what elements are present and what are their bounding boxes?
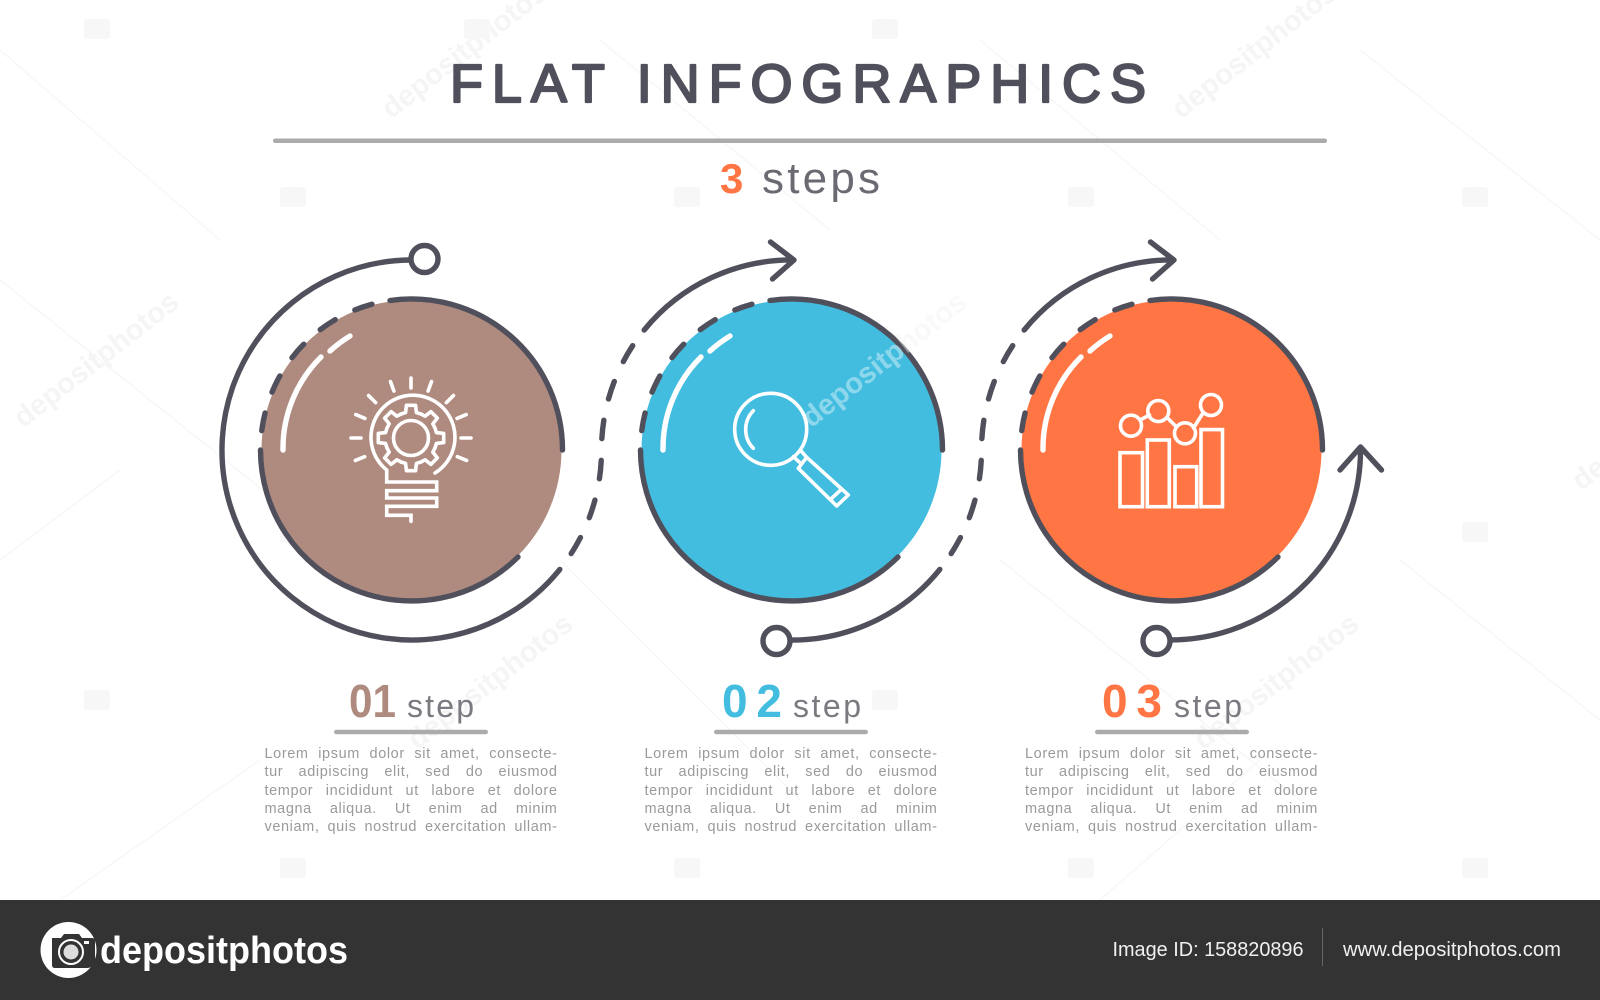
arrow: into step 2 xyxy=(644,242,794,330)
footer logo text: depositphotos xyxy=(100,930,348,972)
text block: step 2 xyxy=(644,746,938,835)
icon: magnifier xyxy=(735,393,848,506)
text block: step 3 xyxy=(1025,746,1318,835)
panel: step 3 circle xyxy=(1020,242,1382,654)
label: 01 step: step xyxy=(407,688,474,724)
text block: step 1: tur adipiscing elit, sed do eiusmod xyxy=(264,764,558,780)
label: 02 step xyxy=(714,675,868,734)
subtitle: 3 steps: steps xyxy=(762,154,880,203)
footer logo icon xyxy=(40,922,96,978)
footer image id: Image ID: 158820896 xyxy=(1112,939,1304,961)
outer arc: step 1 xyxy=(222,260,560,640)
start node: step 1 xyxy=(411,246,438,272)
watermark text xyxy=(8,0,1600,756)
title: FLAT INFOGRAPHICS xyxy=(450,54,1146,114)
text block: step 1: magna aliqua. Ut enim ad minim xyxy=(264,801,558,817)
start node: step 3 xyxy=(1143,628,1170,654)
watermark text: depositphotos xyxy=(1188,608,1365,756)
footer url: www.depositphotos.com xyxy=(1342,939,1561,961)
text block: step 3: magna aliqua. Ut enim ad minim xyxy=(1025,801,1318,817)
text block: step 2: Lorem ipsum dolor sit amet, consecte- xyxy=(644,746,938,762)
footer bar xyxy=(0,900,1600,1000)
subtitle: 3 steps: 3 xyxy=(720,155,743,202)
label: 01 step xyxy=(334,675,488,734)
arrow: out of step 3 xyxy=(1156,447,1382,640)
text block: step 3: veniam, quis nostrud exercitation ullam- xyxy=(1025,819,1318,835)
text block: step 3: tur adipiscing elit, sed do eiusmod xyxy=(1025,764,1318,780)
arrow: into step 3 xyxy=(1024,242,1174,330)
label: 02 step: 02 xyxy=(722,675,782,727)
text block: step 3: Lorem ipsum dolor sit amet, consecte- xyxy=(1025,746,1318,762)
watermark text: depositphotos xyxy=(8,286,185,434)
text block: step 1: veniam, quis nostrud exercitation ullam- xyxy=(264,819,558,835)
icon: bar chart with trend line xyxy=(1120,394,1222,507)
watermark overlay on circle: depositphotos xyxy=(796,286,973,434)
watermark text: depositphotos xyxy=(402,608,579,756)
text block: step 2: tempor incididunt ut labore et dolore xyxy=(644,783,938,799)
label: 01 step: 01 xyxy=(349,675,396,727)
icon: light bulb with gear xyxy=(351,378,471,521)
label: 02 step: step xyxy=(793,688,861,724)
start node: step 2 xyxy=(763,628,790,654)
text block: step 1 xyxy=(264,746,558,835)
label: 03 step xyxy=(1095,675,1249,734)
dashed connector: step 1 to step 2 xyxy=(560,330,644,569)
text block: step 2: tur adipiscing elit, sed do eiusmod xyxy=(644,764,938,780)
text block: step 2: magna aliqua. Ut enim ad minim xyxy=(644,801,938,817)
text block: step 1: Lorem ipsum dolor sit amet, consecte- xyxy=(264,746,558,762)
panel: step 1 circle xyxy=(222,246,644,640)
label: 03 step: step xyxy=(1174,688,1242,724)
dashed connector: step 2 to step 3 xyxy=(940,330,1024,569)
text block: step 2: veniam, quis nostrud exercitation ullam- xyxy=(644,819,938,835)
label: 03 step: 03 xyxy=(1102,675,1162,727)
panel: step 2 circle xyxy=(640,242,1024,654)
watermark camera marks xyxy=(84,19,1488,878)
text block: step 1: tempor incididunt ut labore et dolore xyxy=(264,783,558,799)
watermark text: depositphotos xyxy=(796,286,973,434)
outer arc: step 2 lower xyxy=(776,569,940,640)
text block: step 3: tempor incididunt ut labore et dolore xyxy=(1025,783,1318,799)
